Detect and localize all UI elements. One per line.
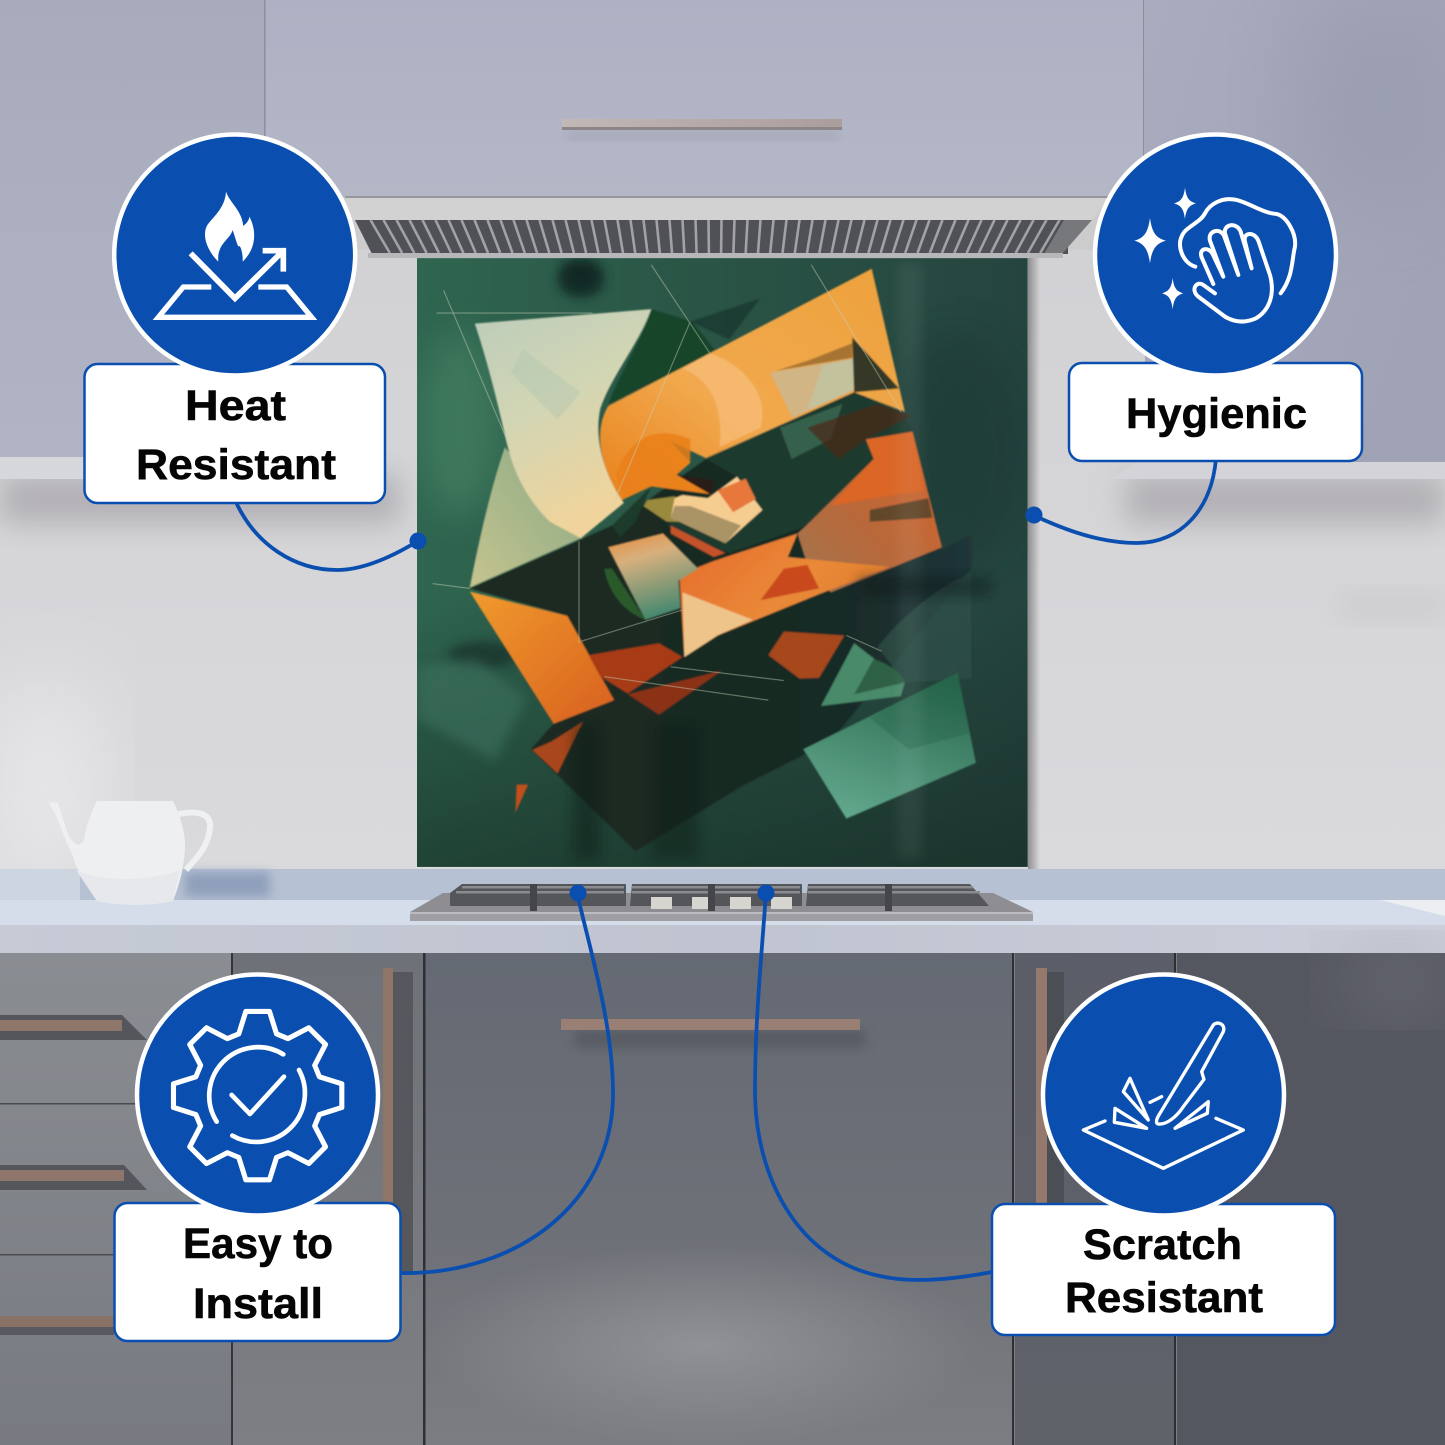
base cabinets xyxy=(0,953,1445,1445)
connector lines xyxy=(235,458,1216,1280)
painting background xyxy=(417,255,1028,870)
heading: Hygienic: Hygienic xyxy=(1126,390,1307,438)
connector dots xyxy=(410,506,1042,902)
icon: gear with check xyxy=(173,1011,342,1180)
painted shapes xyxy=(470,269,976,851)
callout: hygienic xyxy=(1069,134,1362,461)
heading: Easy to Install: Install xyxy=(193,1280,323,1328)
badge circle xyxy=(1095,134,1336,376)
icon: flame on surface xyxy=(158,192,312,317)
teapot xyxy=(48,801,210,905)
wall xyxy=(0,250,1445,880)
heading: Heat Resistant: Resistant xyxy=(136,441,336,489)
callout: heat resistant xyxy=(84,134,385,503)
label box xyxy=(1069,363,1362,461)
connector: easy to install xyxy=(400,893,613,1273)
range hood xyxy=(345,196,1110,258)
countertop xyxy=(0,869,1445,953)
callout: easy to install xyxy=(114,974,400,1341)
label box xyxy=(992,1204,1335,1335)
heading: Easy to Install: Easy to xyxy=(183,1220,333,1268)
cabinet handle top xyxy=(562,119,842,139)
handles xyxy=(0,968,1064,1335)
connector: heat resistant xyxy=(235,500,418,570)
badge circle xyxy=(114,134,355,376)
glass reflections xyxy=(565,263,991,859)
callout: scratch resistant xyxy=(992,974,1335,1335)
icon: hand wiping with sparkles xyxy=(1134,188,1295,322)
upper cabinets xyxy=(0,0,1445,479)
label box xyxy=(114,1203,400,1341)
glass splashback artwork xyxy=(417,255,1028,870)
heading: Scratch Resistant: Resistant xyxy=(1065,1274,1263,1322)
cooktop xyxy=(410,884,1033,921)
badge circle xyxy=(137,974,378,1216)
heading: Scratch Resistant: Scratch xyxy=(1083,1221,1242,1269)
fine lines xyxy=(433,265,901,700)
icon: knife scratching surface xyxy=(1083,1023,1243,1168)
label box xyxy=(84,364,385,503)
badge circle xyxy=(1043,974,1284,1216)
connector: scratch resistant xyxy=(755,893,992,1280)
heading: Heat Resistant: Heat xyxy=(185,382,286,430)
connector: hygienic xyxy=(1033,458,1216,543)
